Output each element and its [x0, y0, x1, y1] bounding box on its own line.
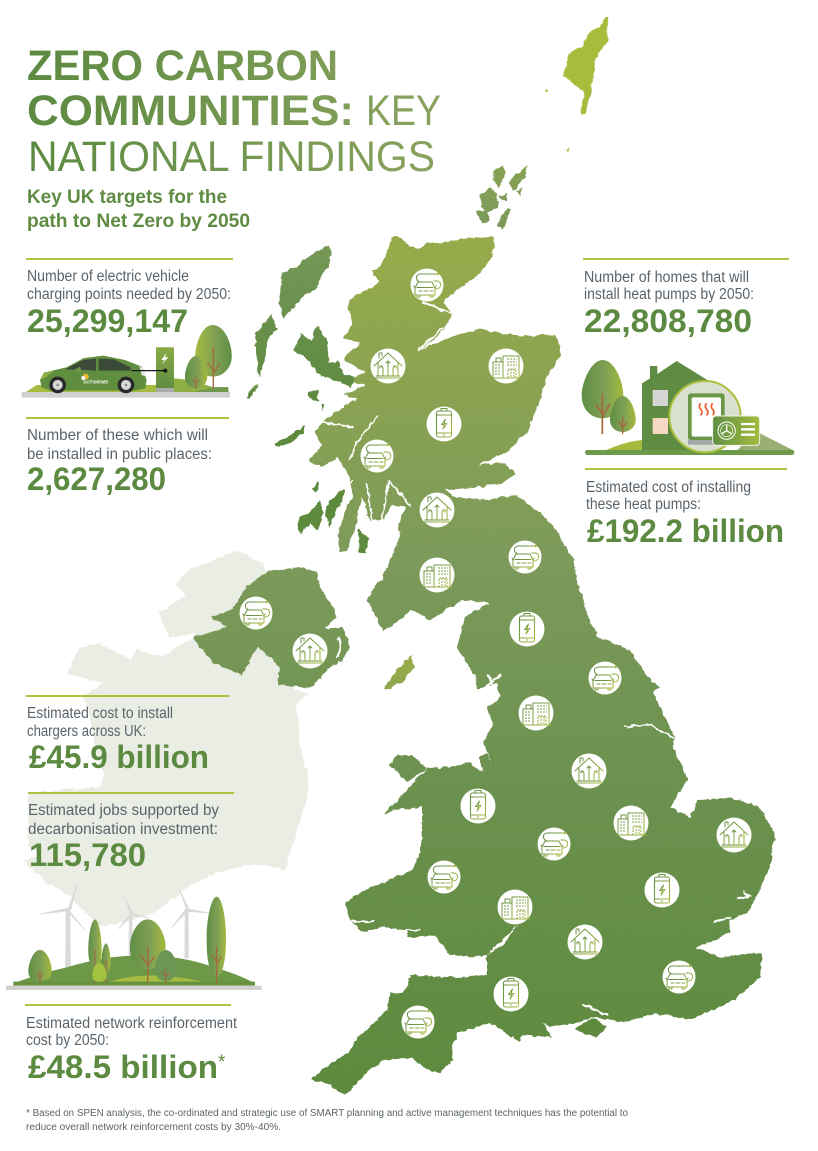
house [642, 361, 710, 450]
electric car [40, 356, 147, 393]
stat: network reinforcement cost: £48.5 billion [28, 1049, 218, 1085]
illustration: wind turbines and trees on hills [6, 883, 262, 990]
icon: EV charging car, Highlands [410, 268, 444, 302]
Orkney islands [475, 165, 528, 229]
stat: heat pump cost: these heat pumps: [586, 496, 701, 513]
stat: public charging points [26, 417, 229, 497]
Great Britain mainland [308, 236, 775, 1095]
stat: network reinforcement cost: Estimated network reinforcement [26, 1015, 238, 1032]
stat: heat pump cost: Estimated cost of installing [586, 479, 751, 496]
icon: heat pump home, Norfolk [716, 818, 752, 852]
icon: buildings, Dumfries [420, 558, 454, 592]
icon: battery, North Pennines [510, 612, 544, 646]
map of United Kingdom [193, 16, 775, 1095]
icon: EV charging car, North Yorkshire [588, 662, 622, 694]
illustration: house with heat pump [582, 360, 794, 455]
footnote: * Based on SPEN analysis, the co-ordinated and strategic use of SMART planning and active management techniques has the potential to [26, 1108, 628, 1119]
wind turbines [40, 883, 210, 968]
icon: heat pump home, Central Belt [420, 492, 454, 528]
title: ZERO CARBON [27, 42, 338, 90]
radiator in circle [669, 381, 741, 452]
Northern Ireland [193, 567, 350, 688]
title [27, 42, 441, 181]
stat: homes with heat pumps: install heat pumps by 2050: [584, 286, 754, 303]
heat pump unit [713, 416, 760, 445]
stat: public charging points: be installed in public places: [27, 446, 212, 463]
stat: jobs supported: decarbonisation investment: [28, 821, 218, 838]
subtitle [27, 186, 250, 232]
stat: jobs supported [28, 792, 234, 873]
map of Ireland background [23, 552, 320, 927]
title: KEY [366, 87, 441, 135]
subtitle: Key UK targets for the [27, 186, 227, 208]
tree: tall [195, 325, 232, 388]
icon: EV charging car, Northern Ireland [240, 596, 272, 630]
icon: buildings, South Wales border [498, 890, 532, 924]
tree: small [185, 356, 207, 389]
illustration: electric car at charger with trees [22, 325, 232, 398]
Shetland islands [544, 16, 609, 152]
stat: EV charging points: 25,299,147 [27, 303, 188, 339]
footnote [26, 1108, 628, 1133]
icon: EV charging car, Borders [508, 540, 542, 574]
title: COMMUNITIES: [27, 87, 354, 135]
EV charger [156, 347, 174, 392]
stat: homes with heat pumps: Number of homes that will [584, 269, 749, 286]
sea inlets [318, 302, 457, 534]
tree: small [610, 396, 636, 434]
tree: large [582, 360, 623, 434]
stat: homes with heat pumps [583, 258, 789, 339]
electric car: SCOTTISHPOWER [83, 379, 109, 384]
trees [28, 897, 226, 983]
stat: charger cost [26, 695, 229, 775]
icon: battery, Hertfordshire [644, 872, 680, 908]
stat: heat pump cost [585, 468, 787, 549]
footnote: reduce overall network reinforcement costs by 30%-40%. [26, 1122, 281, 1133]
icon: heat pump home, Northern Ireland [292, 634, 328, 668]
icon: battery, Somerset [494, 976, 528, 1012]
icon: EV charging car, Kent [662, 960, 696, 994]
stat: EV charging points: charging points needed by 2050: [27, 286, 231, 303]
Isle of Man and Isle of Wight [383, 655, 607, 1037]
stat: public charging points: Number of these which will [27, 427, 208, 444]
stat: homes with heat pumps: 22,808,780 [584, 303, 752, 339]
stat: public charging points: 2,627,280 [27, 461, 166, 497]
stat: heat pump cost: £192.2 billion [587, 513, 784, 549]
icon: EV charging car, Mid Wales [428, 860, 460, 894]
icon: EV charging car, Argyll [360, 440, 394, 472]
icon: battery, North Wales [460, 788, 496, 824]
title: NATIONAL FINDINGS [28, 133, 435, 181]
hills [6, 956, 262, 990]
stat: charger cost: chargers across UK: [27, 723, 146, 740]
icon: heat pump home, East Midlands [572, 754, 606, 788]
stat: EV charging points: Number of electric vehicle [27, 268, 189, 285]
icon: buildings, Northamptonshire [614, 806, 648, 840]
stat: charger cost: £45.9 billion [29, 739, 209, 775]
icon: buildings, Lancashire [518, 696, 554, 730]
stat: network reinforcement cost: * [218, 1052, 226, 1073]
icon: EV charging car, West Midlands [538, 828, 570, 860]
stat: EV charging points [26, 258, 233, 339]
icon: battery, Central Highlands [426, 406, 462, 442]
Outer Hebrides and western islands [245, 245, 368, 552]
stat: jobs supported: 115,780 [29, 837, 146, 873]
stat: jobs supported: Estimated jobs supported by [28, 802, 219, 819]
icon: buildings, Aberdeenshire [488, 348, 524, 384]
stat: network reinforcement cost: cost by 2050: [26, 1032, 109, 1049]
map marker icons [240, 268, 752, 1038]
stat: charger cost: Estimated cost to install [27, 705, 173, 722]
icon: heat pump home, West Highlands [370, 348, 406, 384]
stat: network reinforcement cost [25, 1004, 238, 1085]
icon: heat pump home, Oxfordshire [568, 924, 602, 960]
subtitle: path to Net Zero by 2050 [27, 210, 250, 232]
icon: EV charging car, Devon [402, 1006, 434, 1038]
